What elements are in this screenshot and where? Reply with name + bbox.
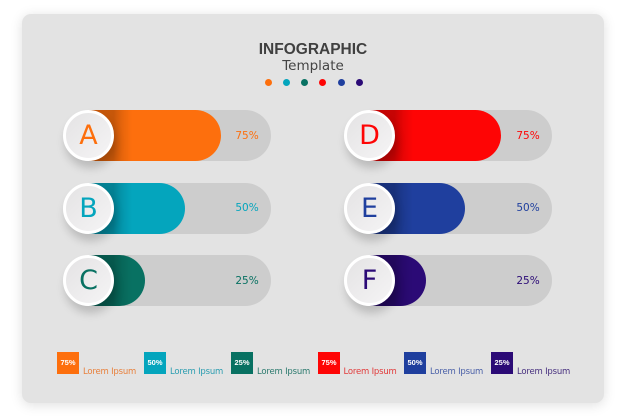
legend: Lorem Ipsum — [170, 366, 223, 376]
bar B 50%: B — [79, 192, 98, 224]
legend — [57, 352, 570, 376]
legend: 50% — [407, 358, 422, 367]
legend: 50% — [147, 358, 162, 367]
bar C 25%: C — [79, 265, 98, 296]
legend: Lorem Ipsum — [344, 366, 397, 376]
legend: Lorem Ipsum — [517, 366, 570, 376]
legend: Lorem Ipsum — [430, 366, 483, 376]
bar A 75%: 75% — [235, 130, 259, 142]
bar B 50%: 50% — [235, 202, 259, 214]
bar E 50%: E — [361, 192, 378, 224]
bar E 50%: 50% — [516, 202, 540, 214]
title: INFOGRAPHIC — [259, 41, 367, 58]
bar C 25% — [62, 255, 271, 316]
bar E 50% — [343, 183, 552, 244]
bar D 75% — [343, 110, 552, 171]
bar D 75%: 75% — [516, 130, 540, 142]
bar A 75%: A — [79, 120, 98, 151]
subtitle: Template — [282, 58, 344, 74]
legend: 75% — [60, 358, 76, 367]
legend: 75% — [321, 358, 336, 367]
legend: Lorem Ipsum — [83, 366, 136, 376]
bar B 50% — [62, 183, 271, 244]
bar F 25%: 25% — [516, 274, 540, 286]
bar F 25%: F — [362, 265, 377, 296]
legend: 25% — [494, 358, 510, 367]
legend: Lorem Ipsum — [257, 366, 310, 376]
bar D 75%: D — [359, 120, 380, 151]
bar A 75% — [62, 110, 271, 171]
colour dots — [265, 79, 363, 86]
bar F 25% — [343, 255, 552, 316]
legend: 25% — [234, 358, 250, 367]
bar C 25%: 25% — [235, 274, 259, 286]
